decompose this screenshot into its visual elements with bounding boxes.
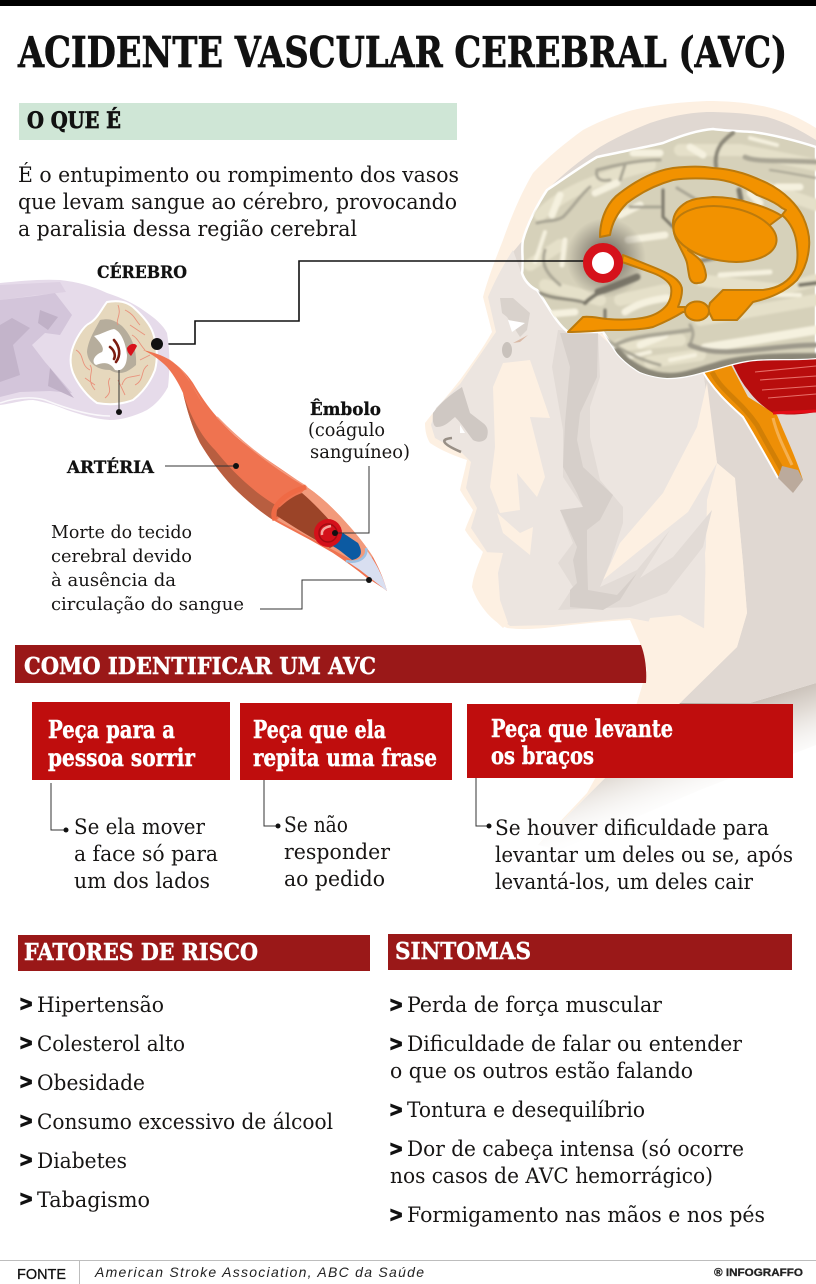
spinal cord cut end [778, 466, 803, 493]
list: symptoms: > [390, 1138, 402, 1161]
footer: American Stroke Association, ABC da Saúde [94, 1264, 424, 1280]
oval vessel body [669, 199, 781, 269]
icon: nose shadow [433, 387, 488, 442]
illustration: brain [522, 129, 816, 378]
label: cérebro: CÉREBRO [97, 262, 187, 283]
crescent and tip [345, 548, 387, 591]
text block: sign 3: levantá-los, um deles cair [495, 870, 754, 894]
illustration: orange cerebral vessels [568, 166, 809, 332]
illustration: head profile [425, 101, 816, 850]
white ventricle [94, 329, 127, 370]
step: frase [240, 703, 452, 780]
list: risk factors: > [20, 1188, 32, 1211]
blocked blue segment [330, 533, 361, 560]
text block: tissue death: circulação do sangue [51, 594, 244, 615]
text block: sign 3: Se houver dificuldade para [495, 816, 769, 840]
cheek inner band [560, 333, 637, 610]
step: sorrir: pessoa sorrir [48, 743, 195, 772]
pale ribbons [530, 150, 816, 362]
cut band [274, 487, 306, 520]
lilac cranial view [0, 280, 169, 420]
deep folds [585, 133, 741, 320]
mid folds [537, 157, 816, 365]
artery highlight [167, 358, 205, 408]
grey matter centre [87, 319, 136, 373]
list: risk factors: > [20, 993, 32, 1016]
text block: tissue death: cerebral devido [51, 546, 192, 567]
neck shadow [538, 683, 816, 850]
panel: sintomas [388, 934, 792, 970]
text block: sign 3: levantar um deles ou se, após [495, 843, 793, 867]
list: risk factors: Tabagismo [37, 1188, 150, 1212]
illustration: brain section [0, 280, 169, 420]
lower branch vessel [568, 255, 686, 332]
list: symptoms: nos casos de AVC hemorrágico) [390, 1164, 713, 1188]
panel: sintomas: SINTOMAS [395, 938, 531, 965]
step: braços: Peça que levante [491, 714, 673, 743]
list: symptoms: Tontura e desequilíbrio [407, 1098, 645, 1122]
brain folds [530, 133, 816, 378]
icon: clot [314, 519, 342, 547]
leader line from brain to stroke site [157, 261, 592, 344]
footer [0, 1260, 816, 1284]
list: risk factors: Colesterol alto [37, 1032, 185, 1056]
step: frase: Peça que ela [253, 715, 386, 744]
brain coronal section [71, 301, 157, 404]
text block: definition [18, 163, 459, 241]
list: symptoms: > [390, 994, 402, 1017]
label: êmbolo: (coágulo [308, 419, 385, 441]
illustration: spinal cord and neck muscle [703, 358, 816, 493]
text block: sign 2 [284, 813, 391, 891]
head outer cream silhouette [425, 101, 816, 845]
text block: tissue death: à ausência da [51, 570, 176, 591]
artery opened salmon end [277, 487, 373, 565]
list: symptoms: > [390, 1033, 402, 1056]
text block: sign 1 [74, 815, 218, 893]
dark edge bands [617, 353, 816, 378]
panel: como identificar [15, 645, 646, 683]
oval vessel outer band [673, 197, 782, 283]
text block: tissue death: Morte do tecido [51, 522, 192, 543]
brain base [522, 129, 816, 378]
red lesion [127, 344, 137, 356]
list: risk factors: > [20, 1149, 32, 1172]
footer: FONTE [17, 1266, 66, 1283]
face area [431, 250, 717, 632]
list: symptoms: o que os outros estão falando [390, 1059, 693, 1083]
artery inner dark [277, 493, 345, 548]
text block: definition: a paralisia dessa região cerebral [18, 217, 357, 241]
top black rule [0, 0, 816, 6]
list: risk factors: > [20, 1110, 32, 1133]
icon: eye [500, 298, 530, 358]
step: sorrir: Peça para a [48, 715, 175, 744]
list: risk factors [20, 993, 333, 1212]
panel: como identificar: COMO IDENTIFICAR UM AVC [24, 653, 376, 680]
list: risk factors: Obesidade [37, 1071, 145, 1095]
step: sorrir [32, 702, 230, 780]
text block: tissue death [51, 522, 244, 615]
label: êmbolo: Êmbolo [310, 397, 381, 420]
list: risk factors: > [20, 1032, 32, 1055]
label: êmbolo [308, 397, 410, 463]
artery shadow band [183, 393, 285, 520]
list: symptoms: Dificuldade de falar ou entender [407, 1032, 743, 1056]
text block: sign 2: Se não [284, 813, 348, 837]
step: frase: repita uma frase [253, 743, 437, 772]
text block: sign 3 [495, 816, 793, 894]
callout leaders with dots [51, 370, 487, 830]
neck muscle [732, 358, 816, 415]
main arc vessel [600, 166, 809, 320]
list: risk factors: > [20, 1071, 32, 1094]
list: symptoms: Dor de cabeça intensa (só ocorre [407, 1137, 744, 1161]
text block: sign 2: responder [284, 840, 391, 864]
spinal cord [703, 363, 803, 480]
cream jaw strip [637, 480, 747, 703]
list: risk factors: Diabetes [37, 1149, 127, 1173]
list: symptoms [390, 993, 765, 1227]
text block: sign 1: Se ela mover [74, 815, 206, 839]
heading: o que é: O QUE É [27, 107, 121, 134]
stroke halo [566, 218, 646, 298]
text block: definition: que levam sangue ao cérebro, provocando [18, 190, 457, 214]
cream cheek patches [472, 360, 550, 628]
junction node [685, 302, 709, 320]
footer: ® INFOGRAFFO [714, 1267, 803, 1279]
text block: sign 1: um dos lados [74, 869, 210, 893]
label: êmbolo: sanguíneo) [310, 441, 410, 463]
list: symptoms: > [390, 1204, 402, 1227]
dark central marks [110, 340, 119, 362]
back of head grey area [513, 112, 816, 703]
panel: o que é [18, 103, 459, 241]
step: braços [467, 704, 793, 778]
list: symptoms: > [390, 1099, 402, 1122]
list: risk factors: Hipertensão [37, 993, 164, 1017]
cheek outer band [552, 330, 712, 610]
list: risk factors: Consumo excessivo de álcool [37, 1110, 333, 1134]
panel: fatores de risco: FATORES DE RISCO [24, 939, 258, 966]
text block: sign 1: a face só para [74, 842, 218, 866]
artery body [143, 350, 387, 591]
list: symptoms: Formigamento nas mãos e nos pés [407, 1203, 765, 1227]
icon: nostril [444, 438, 461, 452]
text block: sign 2: ao pedido [284, 867, 385, 891]
list: symptoms: Perda de força muscular [407, 993, 663, 1017]
illustration: artery [143, 350, 387, 591]
step: braços: os braços [491, 741, 594, 770]
label: artéria: ARTÉRIA [66, 457, 155, 478]
text block: definition: É o entupimento ou rompimento dos vasos [18, 163, 459, 187]
panel: fatores de risco [18, 935, 370, 971]
vessels [76, 305, 150, 398]
icon: stroke site ring [588, 248, 618, 278]
